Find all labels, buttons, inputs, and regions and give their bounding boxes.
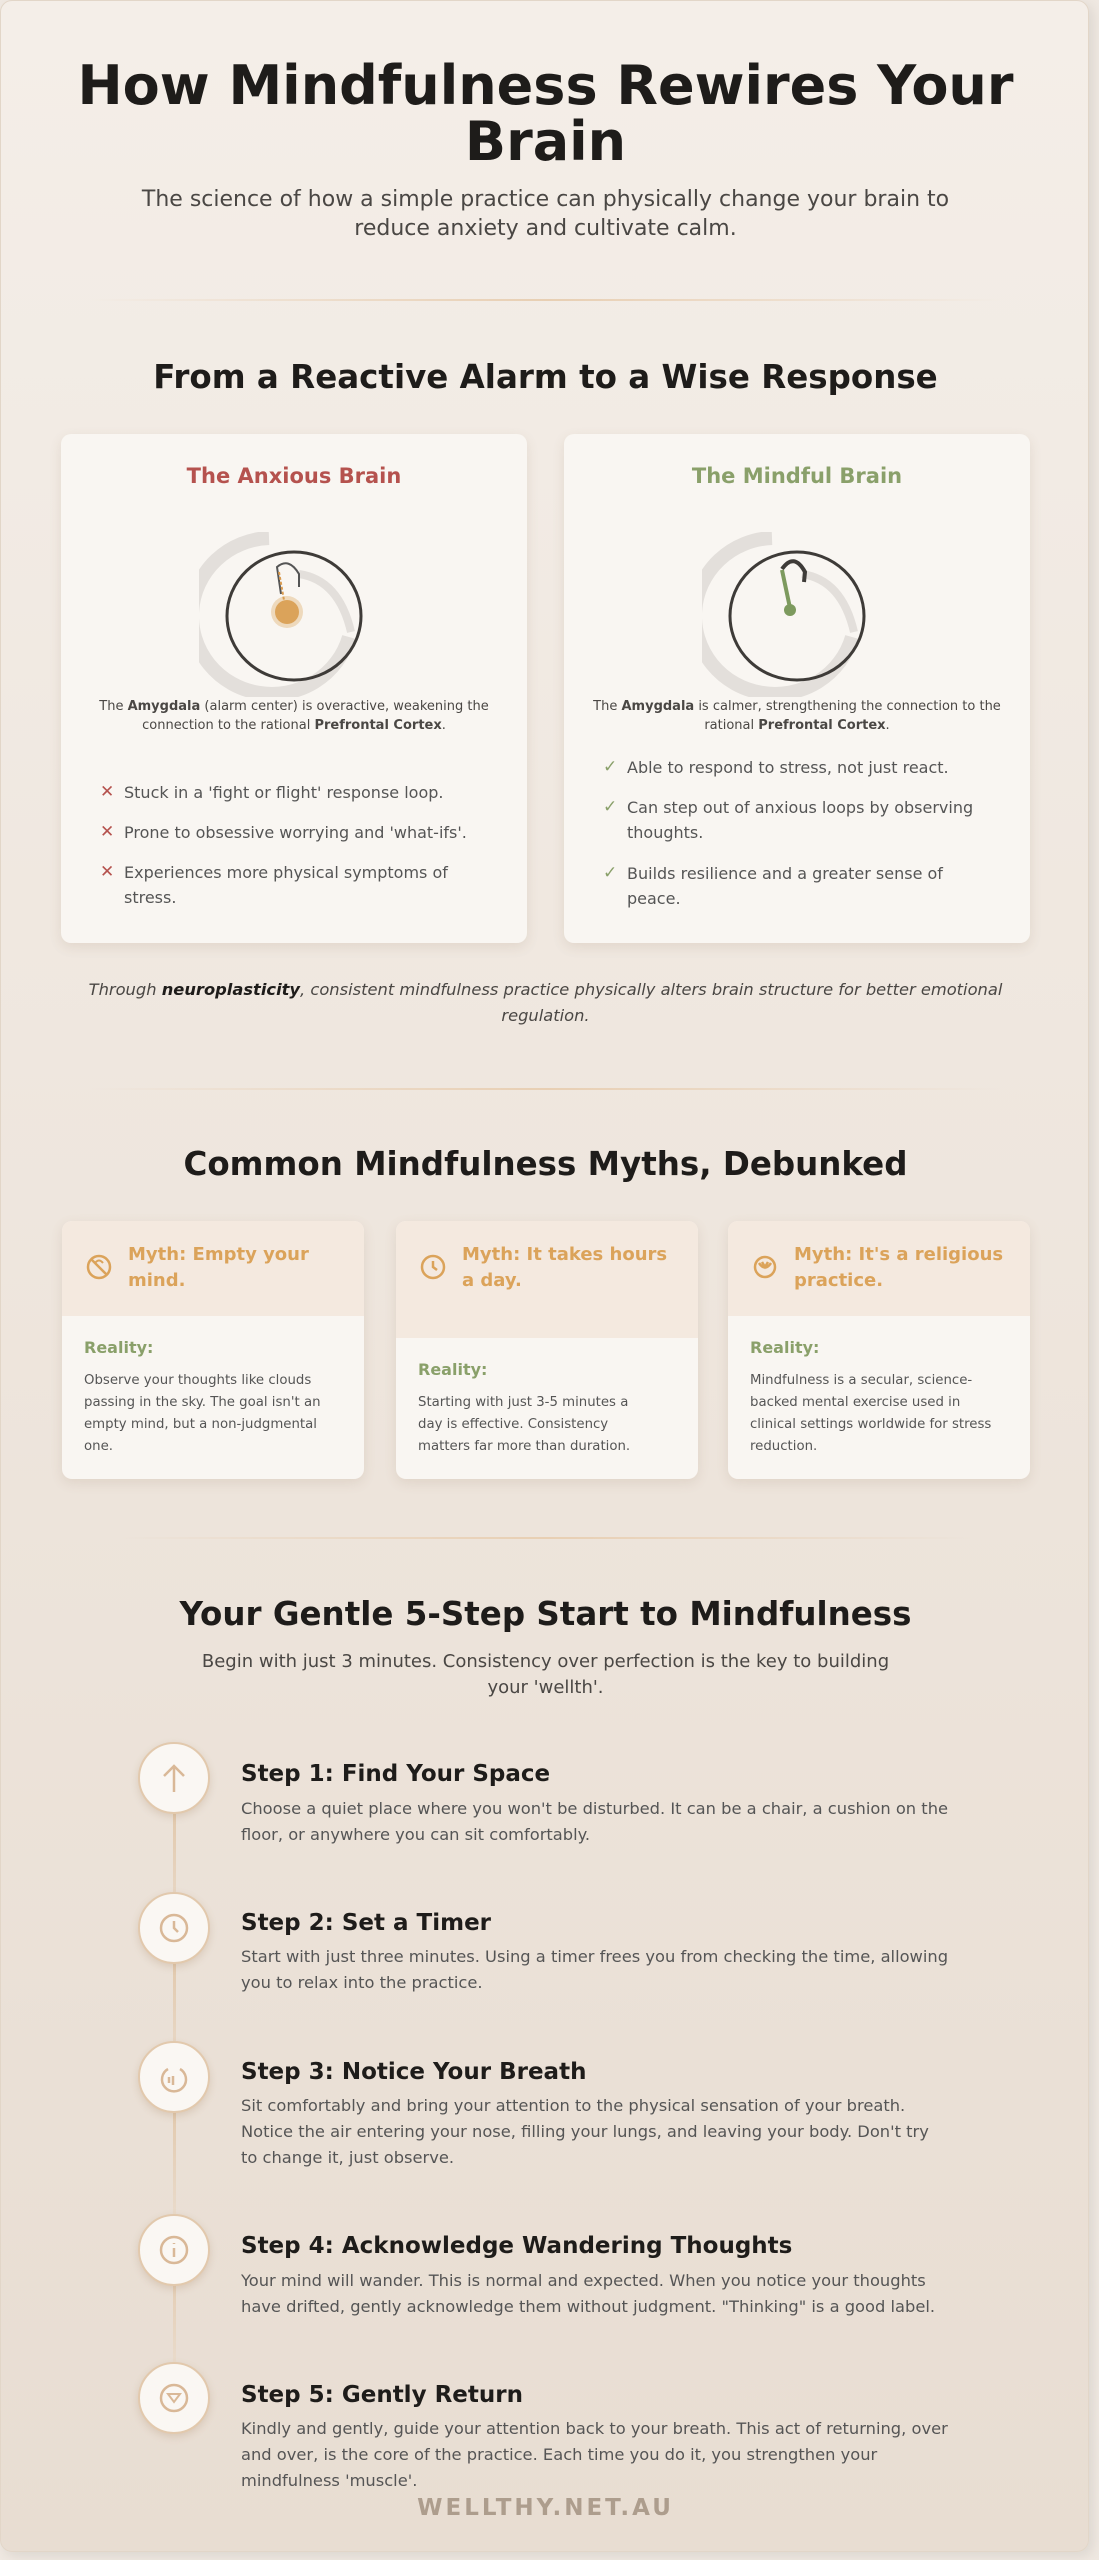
icon: return — [138, 2362, 210, 2434]
myth title 3: Myth: It's a religious practice. — [794, 1244, 1003, 1291]
footer brand: WELLTHY.NET.AU — [417, 2495, 674, 2521]
step 5: Step 5: Gently Return — [241, 2382, 523, 2408]
list: mindful benefits: ✓ — [603, 863, 617, 883]
list: mindful benefits: Builds resilience and a greater sense of peace. — [627, 864, 943, 908]
reality text 2: Starting with just 3-5 minutes a — [418, 1395, 628, 1410]
step 3: Sit comfortably and bring your attention to the physical sensation of your breath. — [241, 2096, 905, 2115]
list: anxious symptoms: Experiences more physical symptoms of stress. — [124, 863, 448, 907]
reality text 3: Mindfulness is a secular, science-backed mental exercise used in clinical settings worldwide for stress reduction. — [750, 1373, 991, 1454]
list: mindful benefits — [603, 757, 973, 908]
step 1 — [136, 1742, 948, 1844]
reality text 1: Observe your thoughts like clouds passing in the sky. The goal isn't an empty mind, but a non-judgmental one. — [84, 1373, 321, 1454]
panel: anxious brain — [61, 434, 527, 943]
panel: mindful brain — [564, 434, 1030, 943]
step 2 — [136, 1892, 948, 1992]
reality text 2: day is effective. Consistency matters far more than duration. — [418, 1417, 630, 1454]
card title: mindful: The Mindful Brain — [692, 464, 902, 488]
icon: clock — [420, 1254, 446, 1280]
icon: anxious brain — [199, 532, 362, 697]
step 2: Start with just three minutes. Using a timer frees you from checking the time, allowing you to relax into the practice. — [241, 1947, 948, 1992]
myth title 1: Myth: Empty your mind. — [128, 1244, 309, 1291]
step 3: Notice the air entering your nose, filling your lungs, and leaving your body. Don't try — [241, 2122, 929, 2141]
title — [77, 54, 1014, 173]
icon: info — [138, 2214, 210, 2286]
panel: myth 2 — [396, 1221, 698, 1479]
reality 3: Reality: — [750, 1338, 819, 1357]
reality 2: Reality: — [418, 1360, 487, 1379]
step 4: Your mind will wander. This is normal and expected. When you notice your thoughts — [241, 2271, 926, 2290]
heading: reactive to wise: From a Reactive Alarm to a Wise Response — [153, 358, 938, 396]
note: neuroplasticity: Through neuroplasticity, consistent mindfulness practice physically alters brain structure for better emotional regulation. — [89, 980, 1002, 1025]
icon: clock — [138, 1892, 210, 1964]
list: mindful benefits: Can step out of anxious loops by observing thoughts. — [627, 798, 973, 842]
card title: anxious: The Anxious Brain — [187, 464, 401, 488]
list: anxious symptoms — [100, 782, 467, 907]
list: anxious symptoms: Prone to obsessive worrying and 'what-ifs'. — [124, 823, 467, 842]
step 2: Step 2: Set a Timer — [241, 1910, 491, 1936]
icon: mindful brain — [702, 532, 866, 697]
heading: steps: Your Gentle 5-Step Start to Mindfulness — [179, 1595, 912, 1633]
steps subtitle: Begin with just 3 minutes. Consistency over perfection is the key to building your 'wellth'. — [202, 1651, 889, 1698]
icon: arrow up — [138, 1742, 210, 1814]
step 3: Step 3: Notice Your Breath — [241, 2059, 586, 2085]
panel: myth 1 — [62, 1221, 364, 1479]
icon: lotus circle — [754, 1256, 776, 1278]
list: anxious symptoms: ✕ — [100, 862, 114, 882]
reality text 2 — [418, 1395, 630, 1454]
step 4: Step 4: Acknowledge Wandering Thoughts — [241, 2233, 792, 2259]
step 3: to change it, just observe. — [241, 2148, 454, 2167]
reality 1: Reality: — [84, 1338, 153, 1357]
title: How Mindfulness Rewires Your — [77, 54, 1014, 117]
step 4 — [136, 2214, 935, 2316]
step 3 — [136, 2041, 929, 2167]
list: anxious symptoms: ✕ — [100, 782, 114, 802]
list: mindful benefits: ✓ — [603, 797, 617, 817]
step 5 — [136, 2362, 948, 2490]
caption: anxious: The Amygdala (alarm center) is overactive, weakening the connection to the rational Prefrontal Cortex. — [99, 699, 489, 733]
icon: crossed circle — [86, 1254, 112, 1280]
icon: breath — [138, 2041, 210, 2113]
heading: myths: Common Mindfulness Myths, Debunked — [184, 1145, 907, 1183]
step 1: Choose a quiet place where you won't be disturbed. It can be a chair, a cushion on the floor, or anywhere you can sit comfortably. — [241, 1799, 948, 1844]
subtitle: The science of how a simple practice can physically change your brain to reduce anxiety and cultivate calm. — [142, 187, 949, 241]
timeline connectors — [173, 1814, 176, 2399]
panel: myth 3 — [728, 1221, 1030, 1479]
list: mindful benefits: Able to respond to stress, not just react. — [627, 758, 949, 777]
step 5: Kindly and gently, guide your attention back to your breath. This act of returning, over and over, is the core of the practice. Each time you do it, you strengthen your mindfulness 'muscle'. — [241, 2419, 948, 2490]
caption: mindful: The Amygdala is calmer, strengthening the connection to the rational Prefrontal Cortex. — [593, 699, 1001, 733]
list: anxious symptoms: ✕ — [100, 822, 114, 842]
title: Brain — [465, 110, 626, 173]
list: mindful benefits: ✓ — [603, 757, 617, 777]
step 4: have drifted, gently acknowledge them without judgment. "Thinking" is a good label. — [241, 2297, 935, 2316]
list: anxious symptoms: Stuck in a 'fight or flight' response loop. — [124, 783, 443, 802]
myth title 2: Myth: It takes hours a day. — [462, 1244, 667, 1291]
step 1: Step 1: Find Your Space — [241, 1761, 550, 1787]
